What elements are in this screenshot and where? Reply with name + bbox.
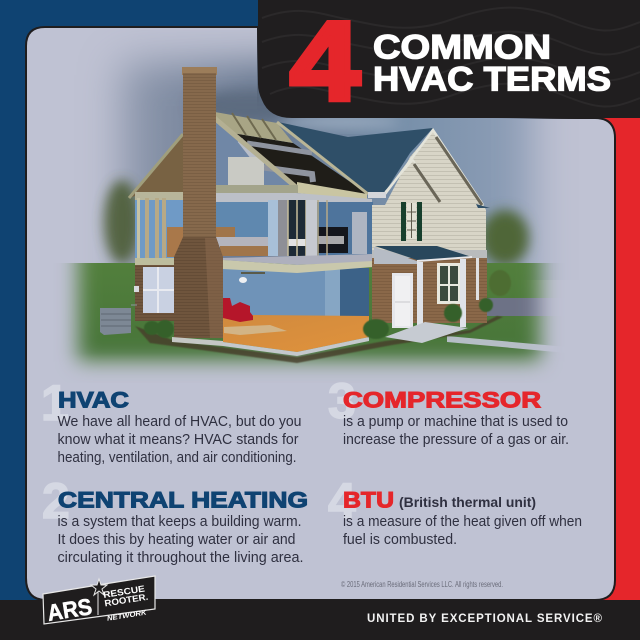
left wing lower brick and window (135, 265, 177, 321)
brick ground floor (372, 250, 487, 323)
shrubs (144, 298, 493, 339)
upper rooms (215, 200, 373, 256)
body (343, 514, 582, 548)
heading: BTU (343, 488, 394, 512)
background: blue side (0, 0, 330, 605)
left trees (104, 180, 140, 264)
body: circulating it throughout the living area. (58, 550, 304, 566)
chimney (172, 67, 223, 346)
tagline: UNITED BY EXCEPTIONAL SERVICE® (367, 613, 603, 625)
floor slab (223, 254, 373, 273)
right trees (481, 210, 529, 266)
body (343, 414, 569, 448)
heading: CENTRAL HEATING (58, 488, 308, 512)
header block (258, 0, 640, 124)
wood floor (223, 315, 369, 352)
body: heating, ventilation, and air conditioning. (58, 450, 296, 466)
scene backdrop: sky (102, 35, 565, 280)
body: is a measure of the heat given off when (343, 514, 582, 530)
front door (392, 273, 413, 328)
numeral 1: 1 (41, 375, 69, 431)
title numeral: 4 (290, 0, 360, 124)
body (58, 514, 304, 566)
red sofa (223, 298, 253, 322)
title text: HVAC TERMS (373, 60, 611, 98)
logo: ARS Rescue Rooter Network: ARS (45, 593, 94, 626)
term 3: compressor (328, 373, 569, 448)
body: We have all heard of HVAC, but do you (58, 414, 302, 430)
term 4: BTU (328, 473, 582, 548)
wave pattern (262, 8, 640, 107)
term 2: central heating (42, 473, 308, 566)
body (58, 414, 302, 466)
upstairs window with shutters (401, 202, 422, 241)
porch window (437, 263, 461, 304)
left wing gable (129, 134, 183, 198)
porch roof (375, 246, 472, 260)
body: fuel is combusted. (343, 532, 457, 548)
body: It does this by heating water or air and (58, 532, 296, 548)
left wing upper windows (135, 192, 185, 266)
blue roof (278, 122, 433, 194)
title text: COMMON (373, 28, 551, 66)
illustration: cutaway house (62, 35, 565, 376)
numeral 4: 4 (328, 473, 356, 529)
logo: ARS Rescue Rooter Network: ROOTER. (104, 592, 149, 608)
footer bar (0, 600, 640, 640)
ceiling band (215, 193, 372, 204)
term 1: HVAC (41, 375, 302, 466)
logo: ARS Rescue Rooter Network: RESCUE (102, 584, 146, 600)
title text (373, 28, 611, 98)
background: red side (590, 110, 640, 605)
numeral 3: 3 (328, 373, 356, 429)
siding wing (368, 130, 490, 255)
body: is a system that keeps a building warm. (58, 514, 302, 530)
copyright: © 2015 American Residential Services LLC. All rights reserved. (341, 580, 503, 589)
body: increase the pressure of a gas or air. (343, 432, 569, 448)
logo: ARS Rescue Rooter Network: NETWORK (107, 609, 148, 623)
ground strip under house (135, 316, 503, 363)
outdoor AC unit (100, 286, 139, 335)
body: is a pump or machine that is used to (343, 414, 568, 430)
heading: HVAC (58, 388, 129, 412)
small tree (489, 270, 511, 296)
body: know what it means? HVAC stands for (58, 432, 299, 448)
scene ground: lawn and driveway (62, 263, 556, 376)
porch columns (417, 259, 466, 340)
lower room (223, 268, 369, 325)
porch floor (385, 322, 468, 343)
logo: ARS Rescue Rooter Network (43, 576, 155, 632)
attic cutaway (212, 112, 368, 201)
numeral 2: 2 (42, 473, 70, 529)
heading note: (British thermal unit) (399, 494, 536, 510)
heading: COMPRESSOR (343, 388, 541, 412)
icon: star (91, 579, 107, 595)
